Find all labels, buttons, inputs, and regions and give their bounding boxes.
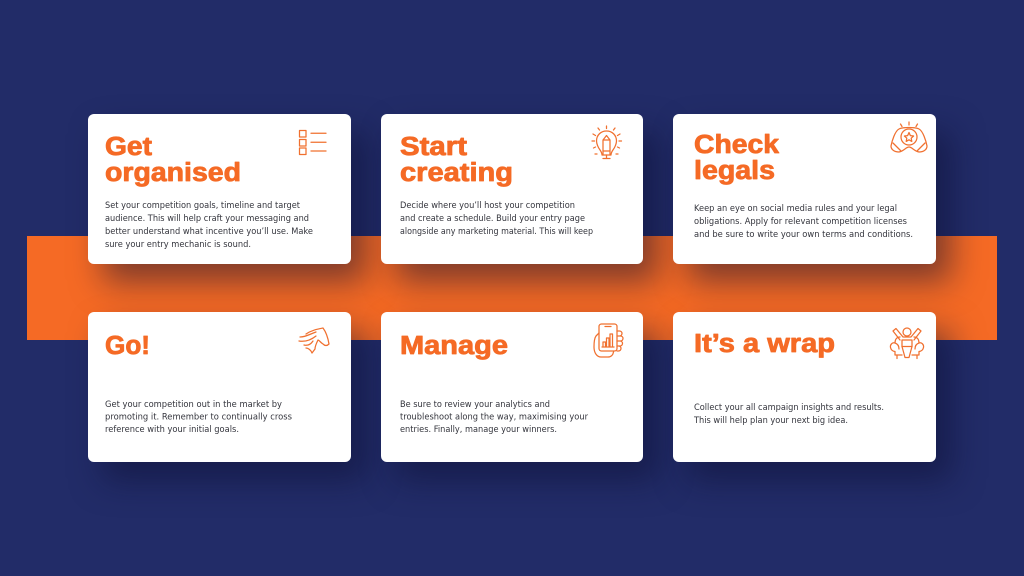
icon: light bulb with pencil <box>592 126 622 158</box>
body text: check legals: Keep an eye on social media rules and your legal <box>694 204 897 214</box>
panel: it's a wrap <box>673 312 936 462</box>
body text: check legals: and be sure to write your own terms and conditions. <box>694 230 913 240</box>
body text: manage: entries. Finally, manage your winners. <box>400 425 557 435</box>
body text: go: Get your competition out in the market by <box>105 400 283 410</box>
icon: person celebrating in armchair <box>890 328 924 358</box>
panel: go <box>88 312 351 462</box>
heading: it's a wrap: It’s a wrap <box>694 330 835 358</box>
body text: it's a wrap <box>693 403 884 426</box>
heading: get organised <box>105 133 241 187</box>
heading: check legals: legals <box>694 157 775 185</box>
body text: get organised: better understand what incentive you’ll use. Make <box>105 227 313 237</box>
body text: start creating <box>400 201 593 237</box>
body text: start creating: alongside any marketing material. This will keep <box>400 227 593 237</box>
body text: start creating: and create a schedule. Build your entry page <box>400 214 585 224</box>
body text: get organised: Set your competition goals, timeline and target <box>105 201 300 211</box>
heading: go: Go! <box>105 332 150 360</box>
body text: manage: Be sure to review your analytics and <box>400 400 550 410</box>
body text: manage: troubleshoot along the way, maximising your <box>400 412 588 422</box>
panel: get organised <box>88 114 351 264</box>
heading: start creating: Start <box>400 133 468 161</box>
body text: it's a wrap: Collect your all campaign insights and results. <box>694 403 884 413</box>
body text: go <box>105 400 292 435</box>
icon: running horse <box>299 328 329 353</box>
orange horizontal band <box>27 236 997 340</box>
body text: check legals <box>694 204 913 240</box>
icon: checklist <box>300 130 326 154</box>
heading: check legals: Check <box>694 131 780 159</box>
icon: hands holding star badge <box>891 122 927 152</box>
body text: it's a wrap: This will help plan your next big idea. <box>693 416 848 426</box>
heading: check legals <box>694 131 780 185</box>
body text: get organised: audience. This will help craft your messaging and <box>105 214 309 224</box>
heading: start creating <box>400 133 513 187</box>
body text: get organised <box>105 201 313 250</box>
heading: manage: Manage <box>400 332 508 360</box>
body text: manage <box>400 400 588 435</box>
body text: go: promoting it. Remember to continually cross <box>105 412 292 422</box>
icon: hand holding phone with chart <box>594 324 623 357</box>
heading: get organised: organised <box>105 159 241 187</box>
heading: get organised: Get <box>105 133 153 161</box>
body text: start creating: Decide where you’ll host your competition <box>400 201 575 211</box>
panel: check legals <box>673 114 936 264</box>
body text: check legals: obligations. Apply for relevant competition licenses <box>694 217 907 227</box>
body text: go: reference with your initial goals. <box>105 425 239 435</box>
heading: start creating: creating <box>400 159 513 187</box>
panel: manage <box>381 312 643 462</box>
body text: get organised: sure your entry mechanic is sound. <box>105 240 251 250</box>
panel: start creating <box>381 114 643 264</box>
